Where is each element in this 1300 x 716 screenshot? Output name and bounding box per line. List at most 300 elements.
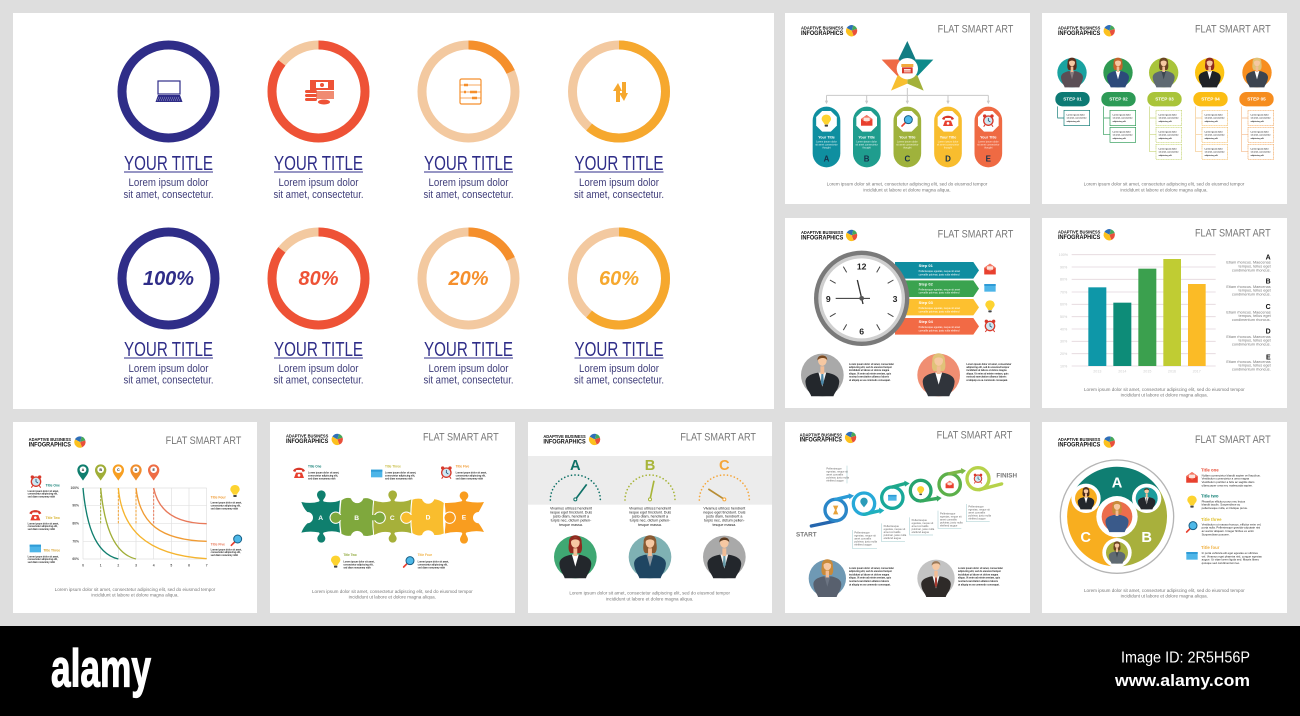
footer note [827, 182, 988, 193]
step 04 column: Lorem ipsum dolor [1205, 147, 1223, 150]
image id: Image ID: 2R5H56P [1121, 650, 1250, 666]
annotation: title four: Lorem ipsum dolor sit amet, [418, 561, 449, 564]
right annotations: Title Four [211, 496, 226, 500]
note 5: pulvinar, justo nulla [940, 520, 963, 524]
text block A: tesque massa. [559, 523, 583, 527]
annotation: title one: Lorem ipsum dolor sit amet, [308, 472, 340, 475]
title one: Nullam consectetur blandit sapien vel faucibus. [1202, 473, 1261, 477]
logo: INFOGRAPHICS [1058, 443, 1100, 449]
note 3: egestas, neque sit [884, 527, 905, 531]
step 05 column: adipiscing elit [1251, 137, 1264, 140]
gauge B: B [645, 458, 655, 474]
icons [984, 264, 996, 332]
ring: orange 20 percent [422, 232, 515, 325]
segmented circle [1060, 460, 1174, 573]
note 4: eleifend augue [912, 530, 930, 534]
gauge A [550, 458, 600, 501]
text block C: Vivamus ultrices hendrerit [703, 507, 745, 511]
line chart: 5 [170, 563, 172, 567]
heading: FLAT SMART ART [166, 435, 242, 447]
person: man with text: aliqua. Ut enim ad minim veniam, quis [849, 372, 892, 375]
puzzle pieces: B [354, 515, 359, 522]
right annotations [211, 485, 242, 557]
puzzle pieces [301, 490, 484, 544]
logo: INFOGRAPHICS [801, 31, 843, 37]
left annotations: Lorem ipsum dolor sit amet, [28, 522, 59, 525]
logo: ADAPTIVE BUSINESS [800, 432, 842, 437]
step 01 column [1055, 58, 1090, 126]
text block: top row captions: Lorem ipsum dolor [579, 177, 659, 189]
step arrows: Pellentesque egestas, neque sit amet [919, 307, 960, 310]
text block B: turpis nec, dictum pellen- [630, 519, 671, 523]
step arrows: convallis pulvinar, justo nulla eleifend [919, 310, 960, 313]
step arrows: Step 04 [919, 319, 934, 324]
legend: condimentum rhoncus. [1232, 368, 1271, 372]
pin markers: B [99, 468, 102, 472]
legend: Etiam rhoncus. Maecenas [1226, 261, 1271, 265]
left annotations [28, 475, 60, 564]
step 03 column: STEP 03 [1155, 97, 1174, 102]
note 6: Pellentesque [968, 505, 984, 509]
footer note: incididunt ut labore et dolore magna aliqua. [1121, 594, 1208, 600]
person: man with text: adipiscing elit, sed do eiusmod tempor [849, 366, 892, 369]
step 05 column: Lorem ipsum dolor [1251, 147, 1269, 150]
text block: bottom row captions: YOUR TITLE [124, 339, 213, 361]
timeline ribbon [810, 468, 1003, 527]
logo: INFOGRAPHICS [543, 439, 586, 445]
ring: yellow top [572, 45, 666, 138]
percentage: 60: 60% [599, 268, 639, 290]
title four: augue. Ut vitae lorem ligula sed. Mauris libero [1202, 558, 1259, 562]
title two: Phasellus efficitur purus nec lectus [1202, 499, 1246, 503]
step 04 column: Lorem ipsum dolor [1205, 113, 1223, 116]
pill B [853, 107, 881, 167]
right annotations: Lorem ipsum dolor sit amet, [211, 502, 242, 505]
legend: E [1266, 354, 1271, 361]
heading: FLAT SMART ART [1195, 227, 1271, 239]
note 4: egestas, neque sit [912, 521, 933, 525]
panel: clock with steps [785, 218, 1030, 408]
person: woman with text: nostrud exercitation ullamco laboris [966, 376, 1007, 379]
title four: vel. Vivamus eget pharetra nisl, congue egestas [1202, 554, 1262, 558]
step arrows: Step 02 [919, 281, 934, 286]
puzzle pieces: E [462, 515, 467, 522]
line chart [70, 486, 208, 567]
step 04 column: sit amet, consectetur [1205, 134, 1225, 137]
clock: 9 [826, 294, 831, 304]
legend: condimentum rhoncus. [1232, 318, 1271, 322]
pill E: E [986, 154, 992, 163]
title three: porta nulla. Pellentesque gravida vulputate nisi [1202, 526, 1261, 530]
logo: ADAPTIVE BUSINESS [801, 26, 843, 31]
logo: INFOGRAPHICS [801, 236, 843, 242]
annotation: title two [331, 553, 375, 570]
pill E [974, 107, 1002, 167]
annotation: title two: sed diam nonummy nibh [343, 568, 371, 570]
footer note: incididunt ut labore et dolore magna aliqua. [1121, 393, 1208, 399]
step 03 column: adipiscing elit [1159, 120, 1172, 123]
legend: tempus, tellus eget [1239, 364, 1272, 368]
gauge C: C [719, 458, 730, 474]
pin markers [77, 464, 159, 481]
text block C: tesque massa. [712, 523, 736, 527]
pill D: thought [944, 147, 952, 150]
pill E: Your Title [980, 136, 997, 140]
person: woman in blue [629, 535, 671, 578]
footer note [1084, 182, 1245, 193]
step 03 column: adipiscing elit [1159, 137, 1172, 140]
person: woman with text: incididunt ut labore et dolore magna [966, 369, 1007, 372]
ring: red 80 percent [272, 232, 365, 325]
step arrows: convallis pulvinar, justo nulla eleifend [919, 273, 960, 276]
line chart: 6 [188, 563, 190, 567]
step 02 column: adipiscing elit [1113, 137, 1126, 140]
heading: FLAT SMART ART [938, 23, 1014, 35]
step 05 column: sit amet, consectetur [1251, 134, 1271, 137]
person: woman with text: nostrud exercitation ullamco laboris [849, 580, 890, 583]
bar chart: 50% [1060, 315, 1068, 319]
title four: In porta vehicula elit eget egestas ex ultricies [1202, 551, 1259, 555]
title four: quisque sed condimentum leo. [1202, 561, 1240, 565]
pill D: Lorem ipsum dolor [938, 141, 958, 144]
logo [801, 230, 857, 242]
footer note: incididunt ut labore et dolore magna aliqua. [349, 595, 436, 601]
person: man with text: incididunt ut labore et dolore magna [958, 573, 999, 576]
annotation: title five: sed diam nonummy nibh [456, 479, 484, 481]
line chart: 100% [70, 486, 79, 490]
footer note [312, 589, 473, 601]
text block: bottom row captions: Lorem ipsum dolor [428, 363, 509, 375]
annotation: title two: Lorem ipsum dolor sit amet, [343, 561, 375, 564]
person: man with text: ut aliquip ex ea commodo consequat. [958, 583, 1000, 586]
ring: navy 100 percent top [122, 45, 215, 138]
bar chart: 20% [1060, 352, 1068, 356]
title three [1187, 517, 1262, 536]
icon: up and down arrows [613, 82, 628, 102]
ring: orange top [422, 45, 515, 138]
panel: progress rings [13, 13, 774, 409]
bar chart: 60% [1060, 303, 1068, 307]
note 5: Pellentesque [940, 511, 956, 515]
step arrows: Step 01 [919, 263, 934, 268]
logo: ADAPTIVE BUSINESS [801, 230, 843, 235]
pill C: thought [903, 147, 912, 150]
legend: tempus, tellus eget [1239, 339, 1272, 343]
timeline icons [833, 474, 982, 514]
heading: FLAT SMART ART [938, 228, 1014, 240]
footer note: Lorem ipsum dolor sit amet, consectetur adipiscing elit, sed do eiusmod tempor [827, 182, 988, 188]
note 6: amet convallis [968, 511, 986, 515]
step 04 column: adipiscing elit [1205, 120, 1218, 123]
line chart: 4 [153, 563, 155, 567]
heading: FLAT SMART ART [1195, 23, 1271, 35]
panel: puzzle [270, 422, 515, 613]
note 5: egestas, neque sit [940, 514, 962, 518]
text block: bottom row captions: YOUR TITLE [274, 339, 363, 361]
footer note: Lorem ipsum dolor sit amet, consectetur adipiscing elit, sed do eiusmod tempor [1084, 387, 1245, 393]
segmented circle: B [1141, 530, 1152, 546]
note 6: egestas, neque sit [968, 508, 990, 512]
note 3: pulvinar, justo nulla [884, 533, 907, 537]
puzzle pieces: D [426, 515, 431, 522]
step 02 column: STEP 02 [1109, 97, 1128, 102]
right annotations: consectetur adipiscing elit, [211, 504, 241, 507]
annotation: title one: Title One [308, 464, 322, 468]
line chart: 0 [82, 563, 84, 567]
segmented circle: C [1080, 530, 1091, 546]
pill B: Your Title [858, 136, 875, 140]
title four: Title four [1201, 545, 1220, 550]
step 04 column: adipiscing elit [1205, 137, 1218, 140]
person: woman with text: ut aliquip ex ea commodo consequat. [966, 379, 1008, 382]
title one [1186, 467, 1261, 487]
text block A: turpis nec, dictum pellen- [551, 519, 592, 523]
clock: 6 [859, 327, 864, 337]
segmented circle: A [1112, 475, 1123, 491]
logo [1058, 25, 1115, 37]
bar chart: 80% [1060, 278, 1068, 282]
footer note: Lorem ipsum dolor sit amet, consectetur adipiscing elit, sed do eiusmod tempor [312, 589, 473, 595]
line chart: 2 [117, 563, 119, 567]
text block: top row captions: Lorem ipsum dolor [128, 177, 209, 189]
text block B: tesque massa. [638, 523, 662, 527]
text block: top row captions: Lorem ipsum dolor [428, 177, 509, 189]
percentage: 20: 20% [448, 268, 489, 290]
bar chart: 2015 [1143, 370, 1151, 374]
bar chart: 10% [1060, 364, 1068, 368]
note 3: eleifend augue [884, 536, 902, 540]
logo: INFOGRAPHICS [29, 443, 71, 449]
bar chart: 70% [1060, 290, 1068, 294]
note 2: Pellentesque [854, 531, 870, 535]
step 05 column: adipiscing elit [1251, 154, 1264, 157]
footer note: Lorem ipsum dolor sit amet, consectetur adipiscing elit, sed do eiusmod tempor [1084, 588, 1245, 594]
person: woman with text: adipiscing elit, sed do eiusmod tempor [849, 570, 892, 573]
left annotations: Title Two [46, 516, 60, 520]
legend: condimentum rhoncus. [1232, 268, 1271, 272]
text block: bottom row captions: sit amet, consectetur. [124, 374, 214, 386]
title three: Title three [1201, 517, 1222, 522]
pill A: Your Title [818, 136, 835, 140]
bar chart: 40% [1060, 327, 1068, 331]
step 04 column: adipiscing elit [1205, 154, 1218, 157]
person: woman with text: Lorem ipsum dolor sit amet, consectetur [966, 363, 1011, 366]
step 04 column: sit amet, consectetur [1205, 151, 1225, 154]
step 02 column: adipiscing elit [1113, 120, 1126, 123]
step 01 column: sit amet, consectetur [1067, 117, 1087, 120]
step 05 column: sit amet, consectetur [1251, 117, 1271, 120]
step 02 column: Lorem ipsum dolor [1113, 113, 1131, 116]
left annotations: Lorem ipsum dolor sit amet, [28, 490, 59, 493]
step 01 column: STEP 01 [1063, 97, 1082, 102]
logo: ADAPTIVE BUSINESS [1058, 26, 1100, 31]
left annotations: consectetur adipiscing elit, [28, 525, 58, 528]
text block: top row captions: sit amet, consectetur. [574, 189, 664, 201]
step arrows [895, 262, 979, 335]
person: man with text [917, 560, 1003, 597]
pin markers: E [152, 468, 155, 472]
right annotations: Title Five [211, 542, 225, 546]
note 2: eleifend augue [854, 543, 872, 547]
step 04 column [1193, 58, 1228, 159]
text block B: neque eget tincidunt. Duis [629, 511, 671, 515]
logo: ADAPTIVE BUSINESS [1058, 230, 1100, 235]
logo [286, 434, 343, 445]
pill C: sit amet consectetur [896, 144, 919, 147]
left annotations: Title One [46, 484, 60, 488]
footer note: incididunt ut labore et dolore magna aliqua. [91, 593, 179, 599]
line chart: 3 [135, 563, 137, 567]
text block: top row captions: YOUR TITLE [574, 153, 664, 175]
step 03 column [1147, 58, 1182, 159]
pill E: Lorem ipsum dolor [978, 141, 999, 144]
heading: FLAT SMART ART [423, 432, 499, 444]
person: man with text: nostrud exercitation ullamco laboris [958, 580, 999, 583]
heading: FLAT SMART ART [1195, 434, 1271, 446]
pill D: D [945, 154, 951, 163]
person: woman with text: aliqua. Ut enim ad minim veniam, quis [849, 577, 892, 580]
pill B: B [864, 154, 870, 163]
title two: pellentesque nulla, et tristique purus. [1202, 506, 1248, 510]
step 04 column: sit amet, consectetur [1205, 117, 1225, 120]
pill A [813, 107, 840, 167]
note 1: eleifend augue [826, 478, 844, 482]
note 5 [938, 511, 963, 528]
gauge B [625, 458, 675, 501]
text block A: Vivamus ultrices hendrerit [550, 507, 592, 511]
annotation: title five: consectetur adipiscing elit, [456, 475, 486, 478]
pill B: sit amet consectetur [856, 144, 878, 147]
step 05 column [1239, 58, 1274, 159]
heading: FLAT SMART ART [680, 432, 756, 444]
bar chart: 2014 [1118, 370, 1126, 374]
puzzle pieces: C [390, 515, 395, 522]
title one: Vestibulum porttitor a felis ac sagittis diam [1202, 480, 1255, 484]
note 6: pulvinar, justo nulla [968, 514, 991, 518]
annotation: title four: consectetur adipiscing elit, [418, 564, 448, 567]
legend: A [1266, 254, 1271, 261]
title three: ac auctor aliquam. Integer finibus ex enim [1202, 529, 1255, 533]
person: man with text: adipiscing elit, sed do eiusmod tempor [958, 570, 1001, 573]
legend: tempus, tellus eget [1239, 289, 1272, 293]
right annotations: consectetur adipiscing elit, [211, 551, 241, 554]
text block: top row captions: YOUR TITLE [124, 153, 213, 175]
text block: top row captions: YOUR TITLE [424, 153, 513, 175]
percentage: 100: 100% [143, 268, 194, 290]
legend: tempus, tellus eget [1239, 264, 1272, 268]
title three: Suspendisse posuere. [1202, 532, 1230, 536]
step 05 column: sit amet, consectetur [1251, 151, 1271, 154]
logo: ADAPTIVE BUSINESS [1058, 437, 1100, 442]
annotation: title three: sed diam nonummy nibh [385, 479, 413, 481]
legend: B [1266, 278, 1271, 285]
text block: bottom row captions: sit amet, consectetur. [274, 374, 364, 386]
text block: top row captions: sit amet, consectetur. [274, 189, 364, 201]
text block A: neque eget tincidunt. Duis [550, 511, 592, 515]
person: woman with text [917, 353, 1011, 396]
annotation: title one: consectetur adipiscing elit, [308, 475, 338, 478]
step 03 column: adipiscing elit [1159, 154, 1172, 157]
person: man with text: incididunt ut labore et dolore magna [849, 369, 890, 372]
note 4: pulvinar, justo nulla [912, 527, 935, 531]
footer note [569, 591, 730, 602]
logo [29, 436, 86, 449]
logo: INFOGRAPHICS [800, 438, 842, 444]
annotation: title five: Lorem ipsum dolor sit amet, [456, 472, 487, 475]
text block: bottom row captions: sit amet, consectetur. [574, 374, 664, 386]
annotation: title three: consectetur adipiscing elit, [385, 475, 415, 478]
panel: five steps with people [1042, 13, 1287, 204]
text block B: Vivamus ultrices hendrerit [629, 507, 671, 511]
person: woman with text: ut aliquip ex ea commodo consequat. [849, 583, 891, 586]
step 05 column: adipiscing elit [1251, 120, 1264, 123]
pill E: thought [984, 147, 993, 150]
line chart: 1 [100, 563, 102, 567]
step 03 column: sit amet, consectetur [1159, 117, 1179, 120]
person: man with text [801, 354, 894, 396]
pill D: sit amet consectetur [937, 144, 959, 147]
step arrows: Pellentesque egestas, neque sit amet [919, 288, 960, 291]
person: woman with text: Lorem ipsum dolor sit amet, consectetur [849, 567, 894, 570]
pill B: Lorem ipsum dolor [856, 141, 877, 144]
text block: bottom row captions: YOUR TITLE [424, 339, 513, 361]
bar chart: 90% [1060, 265, 1068, 269]
logo [1058, 229, 1115, 241]
note 1: egestas, neque sit [826, 469, 848, 473]
pill A: A [824, 154, 830, 163]
logo: INFOGRAPHICS [1058, 235, 1100, 241]
annotation: title four: sed diam nonummy nibh [418, 568, 446, 570]
logo [800, 432, 856, 444]
pill C: C [904, 154, 910, 163]
legend: Etiam rhoncus. Maecenas [1226, 285, 1271, 289]
line chart: 90% [72, 504, 79, 508]
legend: Etiam rhoncus. Maecenas [1226, 360, 1271, 364]
step 02 column [1101, 58, 1136, 142]
person: man with text: Lorem ipsum dolor sit amet, consectetur [849, 363, 894, 366]
legend: condimentum rhoncus. [1232, 343, 1271, 347]
icon: money [305, 80, 334, 104]
text block: bottom row captions: Lorem ipsum dolor [278, 363, 359, 375]
text block: bottom row captions: YOUR TITLE [574, 339, 664, 361]
note 6 [966, 504, 991, 522]
panel: bar chart [1042, 218, 1287, 408]
text block C: neque eget tincidunt. Duis [703, 511, 746, 515]
step 04 column: STEP 04 [1201, 97, 1220, 102]
footer note [1084, 588, 1245, 600]
text block: top row captions: YOUR TITLE [274, 153, 363, 175]
panel: decay curves chart [13, 422, 257, 613]
logo [1058, 436, 1115, 449]
text block C: turpis nec, dictum pellen- [704, 519, 745, 523]
clock: 3 [893, 294, 898, 304]
title one: Title one [1201, 467, 1219, 472]
panel: star org chart [785, 13, 1030, 204]
pill A: thought [822, 147, 831, 150]
step 04 column: Lorem ipsum dolor [1205, 130, 1223, 133]
logo: ADAPTIVE BUSINESS [286, 434, 328, 439]
title two: blandit iaculis. Suspendisse ac [1202, 503, 1241, 507]
step arrows: Step 03 [919, 300, 934, 305]
text block: top row captions: sit amet, consectetur. [124, 189, 214, 201]
logo: INFOGRAPHICS [286, 439, 328, 445]
note 3 [882, 523, 907, 542]
annotation: title one: sed diam nonummy nibh [308, 479, 336, 481]
person: man with text: nostrud exercitation ullamco laboris [849, 376, 890, 379]
step 05 column: STEP 05 [1247, 97, 1266, 102]
text block: bottom row captions: sit amet, consectetur. [424, 374, 514, 386]
panel: snake timeline [785, 422, 1030, 613]
